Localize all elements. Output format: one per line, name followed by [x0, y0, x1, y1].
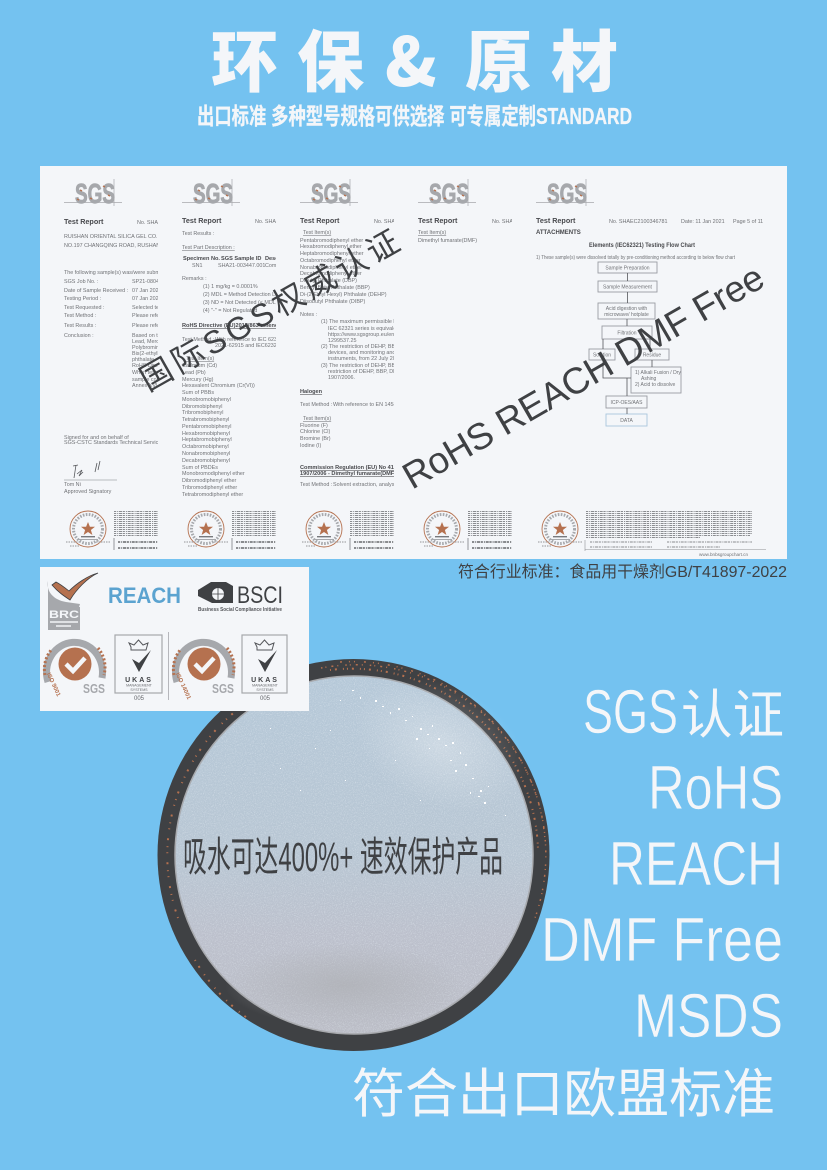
report text: 2021-62915 and IEC62321-1	[215, 343, 285, 349]
report text: Pentabromodiphenyl ether	[300, 238, 363, 244]
powder grain	[176, 677, 532, 1033]
report text: phthalate	[132, 357, 154, 363]
seal: SGS ISO 14001: ISO 14001	[174, 672, 192, 701]
report text: Lead, Mercury	[132, 339, 167, 345]
report text: Test Method :	[64, 313, 96, 319]
report text: SGS Job No. :	[64, 279, 98, 285]
report text: Test Method :	[182, 337, 214, 343]
report header text: Page 5 of 11	[733, 219, 763, 225]
report text: RUISHAN ORIENTAL SILICA GEL CO.,LTD.	[64, 234, 170, 240]
report text: Mercury (Hg)	[182, 377, 214, 383]
report text: Hexavalent Chromium (Cr(VI))	[182, 383, 255, 389]
report text: SHA21-003447.001	[218, 263, 265, 269]
signature	[73, 461, 100, 478]
report text: Selected tests	[132, 305, 166, 311]
report text: Annex XVII	[132, 383, 159, 389]
report text: Heptabromodiphenyl ether	[300, 251, 364, 257]
report text: Test Requested :	[64, 305, 104, 311]
rim speckle	[167, 662, 546, 1020]
stamp	[420, 511, 464, 547]
report text: Nonabromobiphenyl	[182, 451, 230, 457]
report text: (3) ND = Not Detected (< MDL)	[203, 300, 278, 306]
stamp	[66, 511, 110, 547]
report text: Description	[265, 256, 296, 262]
label: MSDS: MSDS	[634, 982, 783, 1051]
label: SGS	[583, 678, 784, 747]
report text: restriction of DEHP, BBP, DBP and	[328, 369, 411, 375]
seal: UKAS management: SYSTEMS	[130, 688, 148, 692]
report text: Please refer	[132, 313, 161, 319]
report header text	[536, 216, 763, 261]
logo: BSCI: Business Social Compliance Initiative	[198, 607, 282, 613]
report header text: ATTACHMENTS	[536, 230, 581, 236]
report text: Hexabromobiphenyl	[182, 431, 230, 437]
report text: (3) The restriction of DEHP, BBP, DBP	[321, 363, 412, 369]
report text: Sum of PBBs	[182, 390, 214, 396]
report text: Test Report	[182, 216, 222, 225]
report page 2	[182, 179, 276, 550]
report text: Nonabromodiphenyl ether	[300, 265, 362, 271]
report text: Sum of PBDEs	[182, 465, 218, 471]
flow chart: DATA	[620, 418, 633, 424]
report text: Test Method :	[300, 402, 332, 408]
report text: sample comply	[132, 377, 168, 383]
flow chart: Residue	[643, 352, 661, 358]
SGS logo	[536, 178, 594, 209]
seal: UKAS management: UKAS	[125, 677, 153, 684]
report header text: Date: 11 Jan 2021	[681, 219, 725, 225]
label: SGS: 认证	[681, 686, 784, 745]
SGS logo: SGS	[547, 178, 587, 209]
logo: BSCI: BSCI	[237, 582, 283, 609]
stamp	[184, 511, 228, 547]
report text: RoHS Directive	[132, 363, 169, 369]
flow chart: Ashing	[641, 376, 657, 382]
report text: Testing Period :	[64, 296, 101, 302]
flow chart: 2) Acid to dissolve	[635, 382, 676, 388]
report text: Lead (Pb)	[182, 370, 206, 376]
report text: Composite	[265, 263, 291, 269]
report page 5: attachments	[536, 178, 766, 557]
SGS logo	[300, 179, 358, 206]
report text: Tetrabromobiphenyl	[182, 417, 229, 423]
silica powder surface	[175, 676, 533, 1034]
report header text: 1) These sample(s) were dissolved totally by pre-conditioning method according to below flow chart	[536, 255, 735, 261]
report text: 1299537.25	[328, 338, 356, 344]
report text: RoHS Directive (EU)2015/863 amending Annex	[182, 323, 306, 329]
watermark: authority certification: 国际SGS权威认证	[134, 223, 406, 398]
EU export standard statement: 符合出口欧盟标准	[352, 1065, 775, 1124]
subtitle: 出口标准 多种型号规格可供选择 可专属定制STANDARD	[197, 103, 632, 129]
report text: 07 Jan 2021	[132, 288, 162, 294]
report text: The following sample(s) was/were submitted and identified	[64, 270, 204, 276]
product photo: silica gel dish	[158, 653, 550, 1051]
report text: Hexabromodiphenyl ether	[300, 244, 362, 250]
report text	[300, 218, 394, 487]
report text: (2) The restriction of DEHP, BBP, DBP	[321, 344, 412, 350]
report text: When tested	[132, 370, 162, 376]
report text: Cadmium (Cd)	[182, 363, 217, 369]
panel: certification logos	[40, 567, 309, 711]
report text: No. SHAE	[137, 220, 162, 226]
report text: Decabromodiphenyl ether	[300, 271, 362, 277]
seal: UKAS management: 005	[134, 696, 145, 702]
report text: SP21-08040	[132, 279, 162, 285]
report text: Based on the	[132, 333, 164, 339]
report text: Test Results :	[182, 231, 214, 237]
report text: Notes :	[300, 312, 317, 318]
seal: UKAS systems	[242, 635, 287, 702]
report text: Tribromodiphenyl ether	[182, 485, 237, 491]
report text: No. SHAE	[492, 219, 517, 225]
logo: BRC: BRC	[49, 609, 79, 621]
flow chart: Filtration	[617, 330, 637, 336]
report text: Test Method :	[300, 482, 332, 488]
report text: Dibromodiphenyl ether	[182, 478, 236, 484]
report text: With reference to EN 14582: 2016	[333, 402, 415, 408]
report header text: Elements (IEC62321) Testing Flow Chart	[589, 242, 696, 249]
report text: Octabromobiphenyl	[182, 444, 229, 450]
report text: Monobromodiphenyl ether	[182, 471, 245, 477]
report header text: No. SHAEC2100346781	[609, 219, 667, 225]
seal: UKAS systems: MANAGEMENT	[252, 684, 279, 688]
report text: Please refer	[132, 323, 161, 329]
report text: Di-(2-Ethyl Hexyl) Phthalate (DEHP)	[300, 292, 387, 298]
report text: Diisobutyl Phthalate (DIBP)	[300, 299, 366, 305]
report text: Tetrabromodiphenyl ether	[182, 492, 243, 498]
label: DMF Free: DMF Free	[541, 906, 783, 975]
report text: Pentabromobiphenyl	[182, 424, 231, 430]
report text: Remarks :	[182, 276, 207, 282]
label: REACH: REACH	[609, 830, 783, 899]
seal: SGS ISO 9001: SGS	[83, 681, 105, 696]
report text: (4) "-" = Not Regulated	[203, 308, 257, 314]
seal: SGS ISO 9001: ISO 9001	[45, 672, 61, 698]
report header text: Test Report	[536, 216, 576, 225]
report text: Benzyl Butyl Phthalate (BBP)	[300, 285, 370, 291]
seal: UKAS systems: UKAS	[251, 677, 279, 684]
SGS logo: SGS	[193, 178, 233, 209]
report text: SGS Sample ID	[221, 256, 261, 262]
report text: Solvent extraction, analysis with	[333, 482, 409, 488]
SGS logo	[418, 179, 476, 206]
report text: 1907/2006.	[328, 375, 355, 381]
report text: instruments, from 22 July 2021	[328, 356, 402, 362]
SGS logo	[182, 179, 240, 206]
SGS logo	[64, 179, 122, 206]
report text	[418, 218, 512, 243]
flow chart	[589, 262, 681, 426]
report text: Test Item(s)	[186, 356, 214, 362]
report text: Test Item(s)	[418, 230, 446, 236]
report text: Conclusion :	[64, 333, 94, 339]
report text: Test Item(s)	[303, 230, 331, 236]
panel: SGS test report scans	[40, 166, 787, 559]
sparkle	[270, 690, 506, 816]
report text: No. SHAE	[255, 219, 280, 225]
report text: Heptabromobiphenyl	[182, 437, 232, 443]
flow chart: 1) Alkali Fusion / Dry	[635, 370, 681, 376]
flow chart: Sample Measurement	[603, 284, 653, 290]
seal: SGS ISO 14001: SGS	[212, 681, 234, 696]
highlight	[333, 653, 547, 837]
SGS logo: SGS	[311, 178, 351, 209]
report text: Specimen No.	[183, 256, 220, 262]
report text: Iodine (I)	[300, 443, 321, 449]
report text: Fluorine (F)	[300, 423, 328, 429]
report text: SN1	[192, 263, 202, 269]
report text: Signed for and on behalf of	[64, 435, 129, 441]
caption: industry standard: 符合行业标准：食品用干燥剂GB/T41897-2022	[458, 563, 787, 581]
logo: BSCI	[198, 582, 283, 613]
report page 1	[64, 179, 158, 550]
report text: No. SHAE	[374, 219, 399, 225]
report text: Test Results :	[64, 323, 96, 329]
report text: Halogen	[300, 389, 323, 395]
report text: Decabromobiphenyl	[182, 458, 230, 464]
label: RoHS: RoHS	[648, 754, 783, 823]
report text: (2) MDL = Method Detection Limit	[203, 292, 284, 298]
flow chart: Acid digestion with	[606, 306, 647, 312]
dish rim	[158, 659, 550, 1051]
report text: Commission Regulation (EU) No 412/2012 amending	[300, 465, 440, 471]
certification list	[541, 678, 784, 1051]
watermark: standards: RoHS REACH DMF Free	[396, 256, 771, 497]
stamp	[302, 511, 346, 547]
flow chart: microwave/ hotplate	[604, 312, 649, 318]
seal: UKAS management: MANAGEMENT	[126, 684, 153, 688]
logo: BRC	[48, 573, 98, 630]
seal: SGS ISO 14001	[173, 642, 234, 701]
stamp	[538, 511, 582, 547]
report text: Date of Sample Received :	[64, 288, 128, 294]
lower shadow	[225, 943, 465, 1027]
report text: Bromine (Br)	[300, 436, 331, 442]
seal: UKAS management	[115, 635, 162, 702]
report text: Approved Signatory	[64, 489, 112, 495]
seal: SGS ISO 9001	[44, 642, 105, 698]
report text: Tom Ni	[64, 482, 81, 488]
report text	[182, 218, 276, 497]
SGS logo: SGS	[75, 178, 115, 209]
report text: Monobromobiphenyl	[182, 397, 231, 403]
flow chart: Sample Preparation	[605, 266, 650, 272]
report text: Tribromobiphenyl	[182, 410, 223, 416]
report text: Octabromodiphenyl ether	[300, 258, 361, 264]
report text: Test Item(s)	[303, 416, 331, 422]
report text: 07 Jan 2021	[132, 296, 162, 302]
report page 5: attachments: www.bnbsgroupchart.cn	[699, 552, 748, 557]
report text	[64, 219, 158, 494]
SGS logo: SGS	[429, 178, 469, 209]
report text: (1) The maximum permissible limit is	[321, 319, 409, 325]
report text: Test Report	[418, 216, 458, 225]
report text: Dibutyl Phthalate (DBP)	[300, 278, 357, 284]
report text: Test Report	[300, 216, 340, 225]
report text: NO.197 CHANGQING ROAD, RUSHAN CITY	[64, 243, 174, 249]
flow chart: Solution	[593, 352, 611, 358]
report text: Polybrominated	[132, 345, 169, 351]
seal: UKAS systems: SYSTEMS	[256, 688, 274, 692]
report text: (1) 1 mg/kg = 0.0001%	[203, 284, 258, 290]
seal: UKAS systems: 005	[260, 696, 271, 702]
report text: 1907/2006 - Dimethyl fumarate(DMF)	[300, 471, 396, 477]
title: 环保&原材	[211, 9, 618, 106]
report text: Dimethyl fumarate(DMF)	[418, 238, 477, 244]
report page 3	[300, 179, 394, 550]
report text: https://www.sgsgroup.eu/en/news	[328, 332, 409, 338]
report text: devices, and monitoring and control	[328, 350, 413, 356]
report text: Bis(2-ethylhexyl)	[132, 351, 172, 357]
logo: REACH: REACH	[108, 583, 181, 608]
report text: Dibromobiphenyl	[182, 404, 222, 410]
report text: Test Report	[64, 217, 104, 226]
report text: IEC 62321 series is equivalent to	[328, 326, 407, 332]
flow chart: ICP-OES/AAS	[611, 400, 643, 406]
report text: Test Part Description :	[182, 245, 235, 251]
label: SGS: SGS	[583, 678, 678, 747]
report page 4	[418, 178, 517, 550]
report text: With reference to IEC 62321-4	[215, 337, 288, 343]
report text: SGS-CSTC Standards Technical Services (Shanghai)	[64, 440, 192, 446]
claim text: 吸水可达400%+ 速效保护产品	[183, 834, 503, 880]
report text: Chlorine (Cl)	[300, 429, 330, 435]
